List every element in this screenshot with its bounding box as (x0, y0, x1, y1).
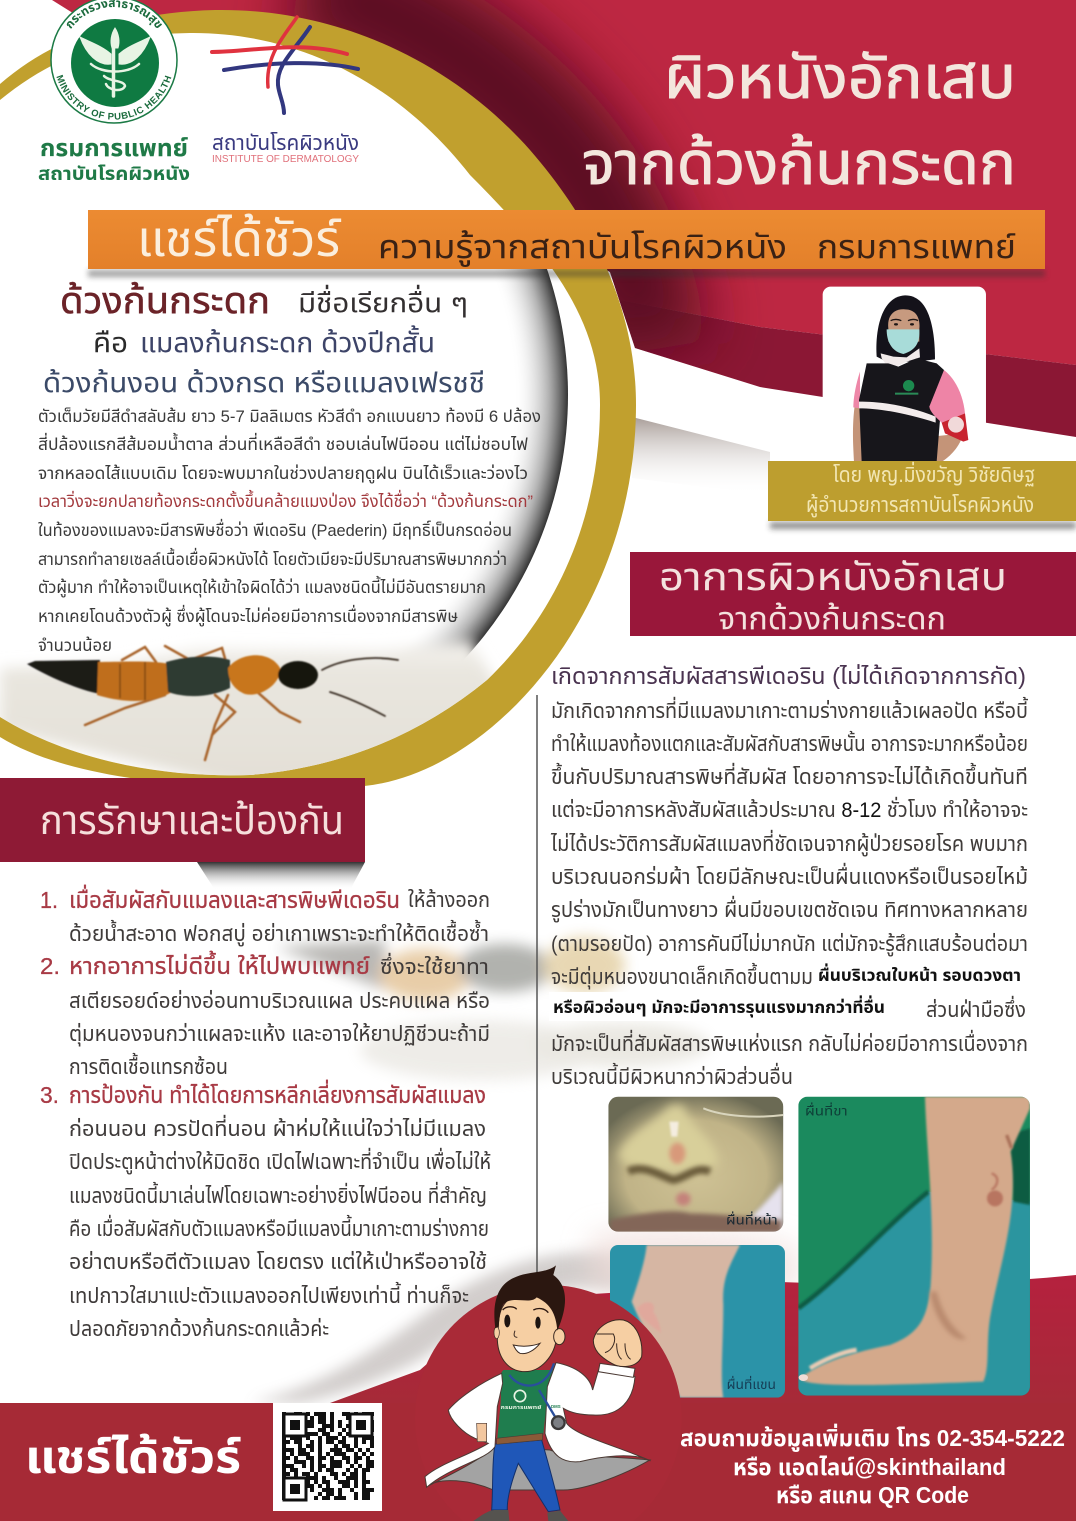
raised fist (593, 1320, 642, 1366)
white circle panel (0, 7, 600, 783)
heading: other names of the beetle: คือ (93, 327, 128, 358)
text block: symptoms description: ส่วนฝ่ามือซึ่ง (926, 995, 1026, 1022)
faded beetle watermark (276, 937, 710, 1080)
contact details (680, 1423, 1065, 1508)
text block: symptoms description: ขึ้นกับปริมาณสารพิษที่สัมผัส โดยอาการจะไม่ได้เกิดขึ้นทันที (551, 762, 1028, 789)
heading: other names of the beetle: ด้วงก้นงอน ด้วงกรด หรือแมลงเฟรชชี (43, 367, 485, 398)
logo: Ministry of Public Health seal (50, 0, 178, 124)
text block: symptoms description: จะมีตุ่มหนองขนาดเล็กเกิดขึ้นตามม (551, 962, 813, 990)
panel: orange banner: ความรู้จากสถาบันโรคผิวหนัง (378, 228, 787, 267)
QR code (273, 1403, 382, 1511)
photo: rash on leg (798, 1097, 1030, 1396)
panel: symptoms heading: จากด้วงก้นกระดก (718, 601, 946, 636)
list item 2 (40, 950, 490, 1079)
shirt logo (501, 1390, 561, 1411)
photo: rash on leg: ผื่นที่ขา (805, 1102, 848, 1119)
photo: rash on arm (610, 1245, 785, 1398)
list item 1: ให้ล้างออก (408, 888, 490, 912)
text block: beetle description: ตัวเต็มวัยมีสีดำสลับส้ม ยาว 5-7 มิลลิเมตร หัวสีดำ อกแบนยาว ท้องมี 6 ปล้อง (38, 406, 541, 426)
heading: other names of the beetle (43, 280, 485, 398)
lab coat (425, 1373, 503, 1487)
title (582, 44, 1016, 197)
title: จากด้วงก้นกระดก (582, 130, 1016, 197)
panel: orange banner: แชร์ได้ชัวร์ (137, 211, 341, 267)
lower swoosh and crimson floor (250, 1230, 1076, 1403)
logo: Ministry of Public Health seal: MINISTRY OF PUBLIC HEALTH (56, 74, 172, 120)
list item 1: ด้วยน้ำสะอาด ฟอกสบู่ อย่าเกาเพราะจะทำให้ติดเชื้อซ้ำ (69, 919, 489, 947)
panel: symptoms heading (630, 552, 1076, 636)
panel: orange banner: กรมการแพทย์ (817, 228, 1016, 265)
list item 3: 3. (40, 1082, 59, 1108)
logo text: Department of Medical Services: สถาบันโรคผิวหนัง (38, 164, 190, 185)
text block: symptoms description: บริเวณนี้มีผิวหนากว่าผิวส่วนอื่น (551, 1062, 793, 1089)
text block: beetle description: ในท้องของแมลงจะมีสารพิษชื่อว่า พีเดอริน (Paederin) มีฤทธิ์เป็นกรดอ่อน (38, 518, 512, 540)
panel: symptoms heading: อาการผิวหนังอักเสบ (659, 557, 1007, 599)
contact details: หรือ แอดไลน์@skinthailand (733, 1454, 1006, 1480)
list item 3: ปิดประตูหน้าต่างให้มิดชิด เปิดไฟเฉพาะที่จำเป็น เพื่อไม่ให้ (69, 1147, 491, 1175)
mascot: cartoon doctor on red circle (415, 1265, 682, 1521)
text block: treatment list (40, 884, 491, 1341)
list item 2: สเตียรอยด์อย่างอ่อนทาบริเวณแผล ประคบแผล หรือ (69, 989, 490, 1013)
heading: other names of the beetle: มีชื่อเรียกอื่น ๆ (298, 284, 468, 318)
callout: corrected text patches (549, 960, 1030, 1021)
list item 2: ตุ่มหนองจนกว่าแผลจะแห้ง และอาจให้ยาปฏิชีวนะถ้ามี (69, 1022, 490, 1047)
list item 3: ปลอดภัยจากด้วงก้นกระดกแล้วค่ะ (69, 1317, 329, 1341)
list item 3 (40, 1079, 491, 1341)
logo text: Department of Medical Services (38, 135, 190, 185)
shirt logo: DMS (551, 1404, 561, 1409)
cuff (598, 1363, 635, 1377)
text block: beetle description: จำนวนน้อย (38, 635, 112, 655)
panel: treatment and prevention heading: การรักษาและป้องกัน (40, 799, 344, 843)
logo: Institute of Dermatology (212, 17, 359, 165)
text block: beetle description: ตัวผู้มาก ทำให้อาจเป็นเหตุให้เข้าใจผิดได้ว่า แมลงชนิดนี้ไม่มีอันตรายมาก (38, 575, 486, 599)
logo: Institute of Dermatology: INSTITUTE OF DERMATOLOGY (212, 153, 359, 165)
list item 3: เทปกาวใสมาแปะตัวแมลงออกไปเพียงเท่านี้ ท่านก็จะ (69, 1281, 469, 1308)
panel: author plate: ผู้อำนวยการสถาบันโรคผิวหนัง (806, 493, 1034, 518)
text block: symptoms description: บริเวณนอกร่มผ้า โดยมีลักษณะเป็นผื่นแดงหรือเป็นรอยไหม้ (551, 862, 1028, 889)
text block: symptoms description (549, 663, 1030, 1089)
photo: rash on face (608, 1097, 783, 1233)
list item 3: แมลงชนิดนี้มาเล่นไฟโดยเฉพาะอย่างยิ่งไฟนีออน ที่สำคัญ (69, 1181, 487, 1208)
contact details: สอบถามข้อมูลเพิ่มเติม โทร 02-354-5222 (680, 1423, 1065, 1452)
text block: beetle description: หากเคยโดนด้วงตัวผู้ ซึ่งผู้โดนจะไม่ค่อยมีอาการเนื่องจากมีสารพิษ (38, 604, 458, 628)
belt (497, 1433, 543, 1444)
callout: corrected text patches: หรือผิวอ่อนๆ มักจะมีอาการรุนแรงมากกว่าที่อื่น (553, 995, 885, 1018)
face features (503, 1307, 548, 1354)
text block: symptoms description: แต่จะมีอาการหลังสัมผัสแล้วประมาณ 8-12 ชั่วโมง ทำให้อาจจะ (551, 796, 1028, 822)
list item 1: เมื่อสัมผัสกับแมลงและสารพิษพีเดอริน (69, 884, 400, 913)
head (497, 1293, 558, 1372)
list item 2: การติดเชื้อแทรกซ้อน (69, 1052, 228, 1079)
panel: author plate: โดย พญ.มิ่งขวัญ วิชัยดิษฐ (833, 461, 1035, 487)
text block: symptoms description: ทำให้แมลงท้องแตกและสัมผัสกับสารพิษนั้น อาการจะมากหรือน้อย (551, 730, 1028, 756)
contact details: หรือ สแกน QR Code (776, 1482, 969, 1508)
title: ผิวหนังอักเสบ (664, 44, 1016, 111)
text block: beetle description: สามารถทำลายเซลล์เนื้อเยื่อผิวหนังได้ โดยตัวเมียจะมีปริมาณสารพิษมากกว่า (38, 547, 507, 569)
shirt logo: กรมการแพทย์ (501, 1405, 542, 1411)
text block: symptoms description: เกิดจากการสัมผัสสารพีเดอริน (ไม่ได้เกิดจากการกัด) (551, 663, 1026, 689)
list item 2: 2. (40, 953, 60, 979)
trousers (492, 1440, 560, 1512)
shirt (497, 1370, 555, 1438)
heading: other names of the beetle: แมลงก้นกระดก ด้วงปีกสั้น (140, 325, 435, 358)
heading: other names of the beetle: ด้วงก้นกระดก (60, 280, 270, 321)
text block: beetle description: เวลาวิ่งจะยกปลายท้องกระดกตั้งขึ้นคล้ายแมงป่อง จึงได้ชื่อว่า “ด้วงก้นกระดก” (38, 489, 533, 511)
list item 2: ซึ่งจะใช้ยาทา (380, 952, 489, 979)
hand on hip (477, 1423, 487, 1442)
logo text: Department of Medical Services: กรมการแพทย์ (40, 135, 188, 162)
text block: symptoms description: มักจะเป็นที่สัมผัสสารพิษแห่งแรก กลับไม่ค่อยมีอาการเนื่องจาก (551, 1029, 1028, 1056)
list item 1 (40, 884, 490, 947)
panel: author plate (768, 461, 1076, 529)
text block: symptoms description: (ตามรอยปัด) อาการคันมีไม่มากนัก แต่มักจะรู้สึกแสบร้อนต่อมา (551, 932, 1028, 957)
photo: rash on arm: ผื่นที่แขน (727, 1375, 776, 1392)
logo: Institute of Dermatology: สถาบันโรคผิวหนัง (212, 132, 359, 155)
footer slogan: แชร์ได้ชัวร์ (25, 1431, 242, 1483)
panel: orange banner (88, 210, 1045, 277)
text block: symptoms description: รูปร่างมักเป็นทางยาว ผื่นมีขอบเขตชัดเจน ทิศทางหลากหลาย (551, 895, 1028, 923)
hair (494, 1265, 565, 1331)
text block: beetle description: จากหลอดไส้แบบเดิม โดยจะพบมากในช่วงปลายฤดูฝน บินได้เร็วและว่องไว (38, 463, 528, 485)
gold ring (0, 10, 636, 788)
illustration: rove beetle photo (0, 640, 500, 790)
list item 3: คือ เมื่อสัมผัสกับตัวแมลงหรือมีแมลงนี้มาเกาะตามร่างกาย (69, 1214, 489, 1241)
list item 3: การป้องกัน ทำได้โดยการหลีกเลี่ยงการสัมผัสแมลง (69, 1079, 486, 1108)
list item 3: ก่อนนอน ควรปัดที่นอน ผ้าห่มให้แน่ใจว่าไม่มีแมลง (69, 1114, 486, 1141)
text block: symptoms description: มักเกิดจากการที่มีแมลงมาเกาะตามร่างกายแล้วเผลอปัด หรือบี้ (551, 696, 1028, 723)
photo: rash on face: ผื่นที่หน้า (726, 1210, 778, 1227)
text block: symptoms description: ไม่ได้ประวัติการสัมผัสแมลงที่ชัดเจนจากผู้ป่วยรอยโรค พบมาก (550, 829, 1028, 857)
background: page and red header (52, 0, 1076, 474)
column divider line (536, 695, 538, 1312)
text block: beetle description (38, 406, 541, 655)
shoes (473, 1510, 509, 1521)
list item 2: หากอาการไม่ดีขึ้น ให้ไปพบแพทย์ (69, 950, 370, 979)
stethoscope (509, 1363, 565, 1429)
footer band (0, 1403, 1076, 1521)
text block: beetle description: สี่ปล้องแรกสีส้มอมน้ำตาล ส่วนที่เหลือสีดำ ชอบเล่นไฟนีออน แต่ไม่ชอบไฟ (38, 432, 528, 454)
list item 1: 1. (40, 887, 58, 913)
callout: corrected text patches: ผื่นบริเวณใบหน้า รอบดวงตา (818, 963, 1021, 985)
panel: treatment and prevention heading (0, 778, 365, 890)
list item 3: อย่าตบหรือตีตัวแมลง โดยตรง แต่ให้เป่าหรืออาจใช้ (69, 1250, 487, 1274)
photos: skin rash examples (608, 1097, 1030, 1398)
icon: caduceus emblem (80, 28, 150, 96)
photo: doctor portrait card (823, 287, 986, 462)
icon: crossed ribbons (212, 17, 358, 113)
cape lining (427, 1447, 650, 1490)
